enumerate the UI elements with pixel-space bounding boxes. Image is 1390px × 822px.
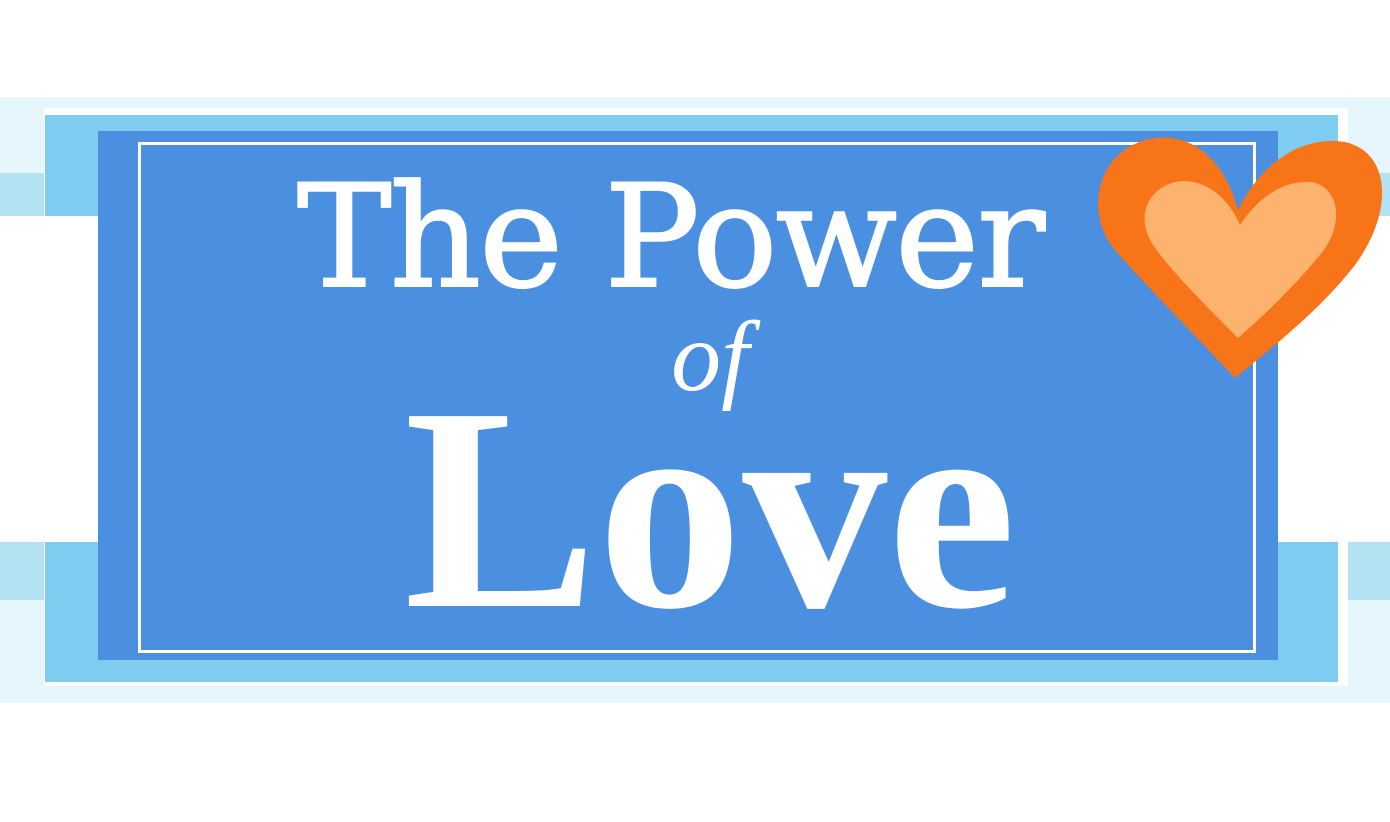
white frame top xyxy=(44,108,1348,216)
title: of: of xyxy=(671,301,749,412)
inner white border xyxy=(138,142,1256,653)
title: Love: Love xyxy=(404,348,1016,669)
stripe bottom xyxy=(0,542,1390,600)
white frame bottom xyxy=(44,542,1348,686)
light blue panel bottom xyxy=(45,542,1338,682)
background white middle xyxy=(0,216,1390,542)
title: The Power: The Power xyxy=(297,155,1043,320)
dark blue panel xyxy=(98,131,1278,660)
light blue panel top xyxy=(45,115,1338,216)
background pale band xyxy=(0,97,1390,703)
stripe top xyxy=(0,173,1390,216)
icon: heart xyxy=(1098,138,1382,378)
